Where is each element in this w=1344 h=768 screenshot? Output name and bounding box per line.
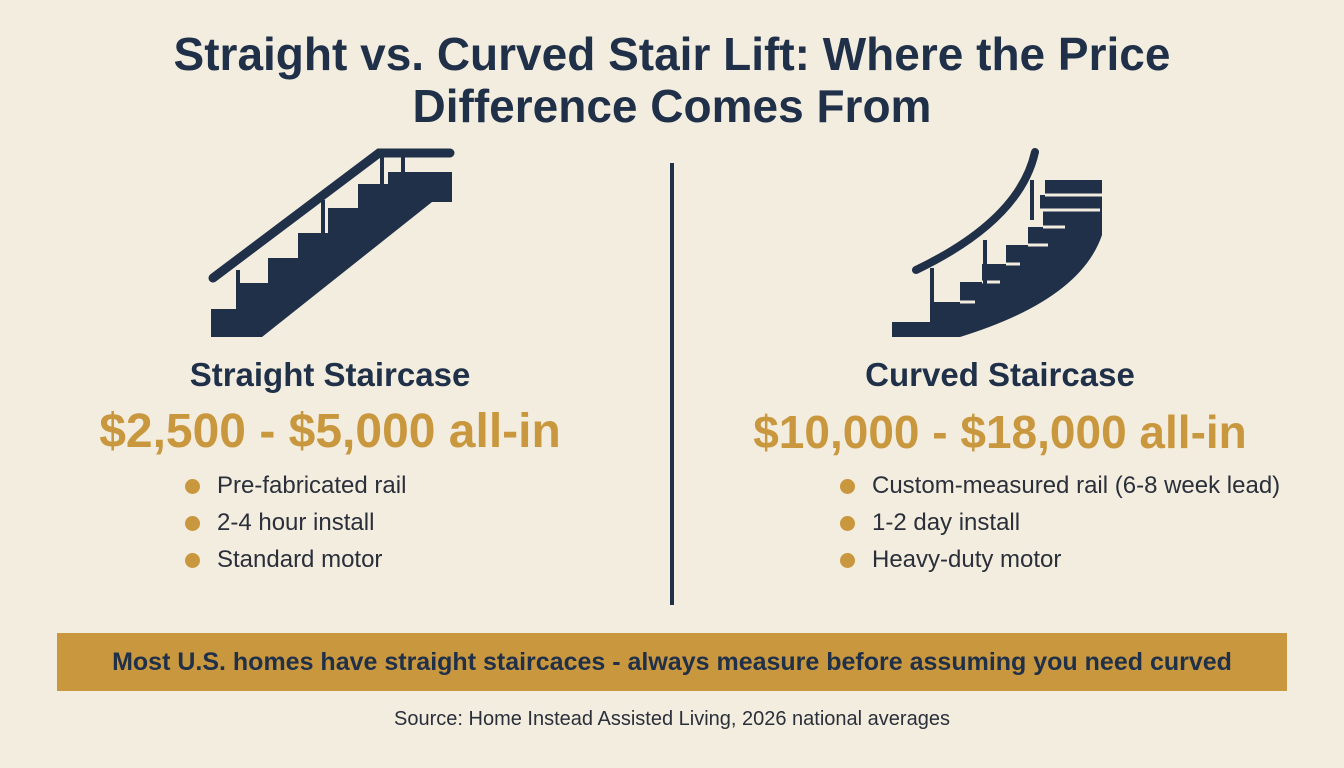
icon: curved staircase — [892, 148, 1102, 337]
list: straight: Pre-fabricated rail — [217, 472, 406, 499]
list: curved: Custom-measured rail (6-8 week lead) — [872, 472, 1280, 499]
source: Source: Home Instead Assisted Living, 2026 national averages — [394, 708, 950, 730]
list: straight: Standard motor — [217, 546, 382, 573]
list: straight: 2-4 hour install — [217, 509, 374, 536]
heading: curved: Curved Staircase — [865, 356, 1135, 393]
list: curved: 1-2 day install — [872, 509, 1020, 536]
list: straight — [185, 472, 406, 573]
callout banner: Most U.S. homes have straight staircaces - always measure before assuming you need curved — [112, 648, 1232, 676]
heading: straight: Straight Staircase — [190, 356, 470, 393]
price: curved: $10,000 - $18,000 all-in — [753, 406, 1247, 458]
title: Difference Comes From — [413, 80, 931, 132]
title: Straight vs. Curved Stair Lift: Where the Price — [174, 28, 1170, 80]
panel: curved — [753, 356, 1280, 573]
title — [174, 28, 1170, 132]
divider — [670, 163, 674, 605]
callout banner — [57, 633, 1287, 691]
list: curved — [840, 472, 1280, 573]
panel: straight — [99, 356, 561, 573]
list: curved: Heavy-duty motor — [872, 546, 1061, 573]
price: straight: $2,500 - $5,000 all-in — [99, 405, 561, 458]
icon: straight staircase — [208, 148, 454, 337]
